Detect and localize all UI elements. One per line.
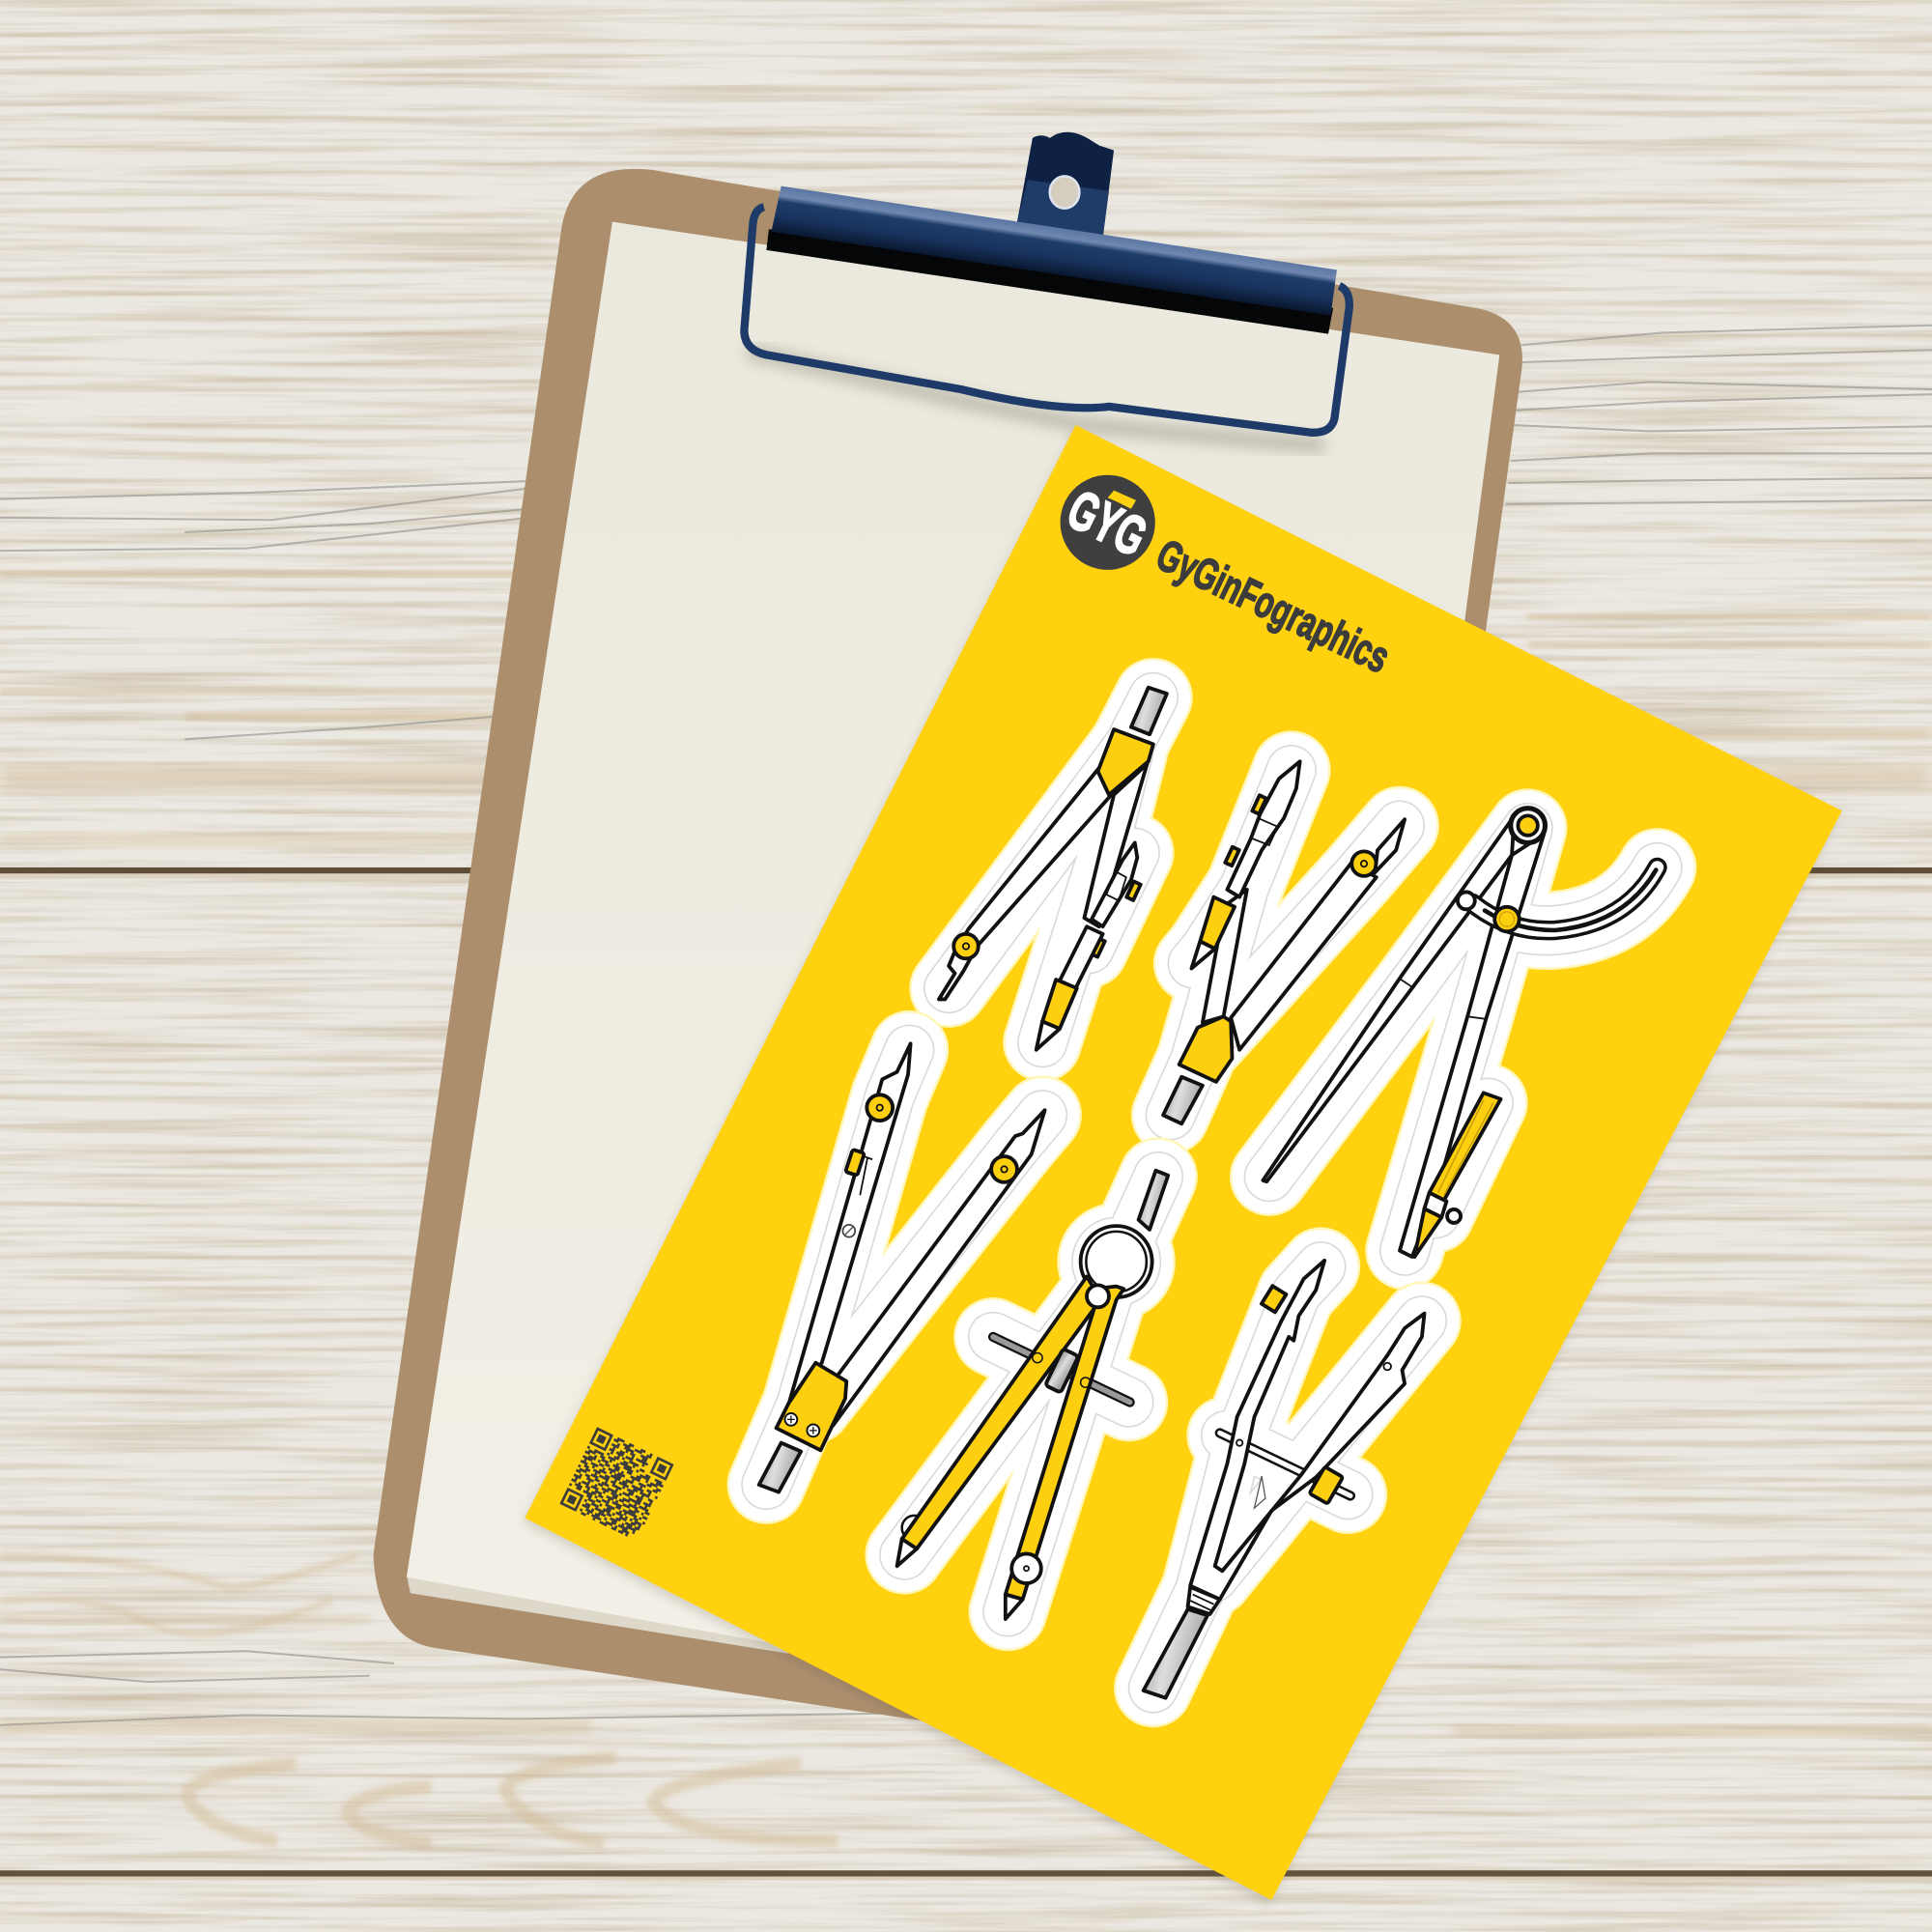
clip black gap bbox=[766, 229, 1333, 334]
logo badge bbox=[1058, 475, 1156, 570]
cathedral grain arcs bbox=[0, 1555, 838, 1843]
sticker sheet shadow bbox=[523, 430, 1839, 1905]
sticker: long compass with yellow head, left bbox=[759, 1043, 1045, 1492]
grey grain lines bbox=[0, 326, 1932, 1725]
brand logo bbox=[1058, 475, 1398, 683]
yellow sticker sheet bbox=[525, 425, 1842, 1900]
QR code bbox=[559, 1427, 674, 1541]
clip tab bbox=[1016, 132, 1114, 238]
sticker: wing divider with pencil, top right bbox=[1263, 809, 1658, 1257]
clip wire loop bbox=[744, 207, 1350, 433]
paper stack bbox=[407, 222, 1499, 1654]
clip wire shadow bbox=[747, 352, 1324, 446]
sticker: inverted compass with ruling pen, top centre bbox=[1163, 761, 1405, 1123]
sticker: beam compass, bottom right bbox=[1144, 1261, 1424, 1698]
brand wordmark: GyGinFographics bbox=[1150, 529, 1398, 683]
metal clip bbox=[744, 132, 1350, 433]
sticker: yellow bow compass, centre bbox=[897, 1171, 1168, 1619]
logo badge: GYG bbox=[1058, 478, 1156, 569]
clipboard board bbox=[373, 169, 1522, 1775]
sticker: compass with ruling pen, top left bbox=[939, 688, 1167, 1050]
clip roller bar bbox=[771, 186, 1337, 316]
